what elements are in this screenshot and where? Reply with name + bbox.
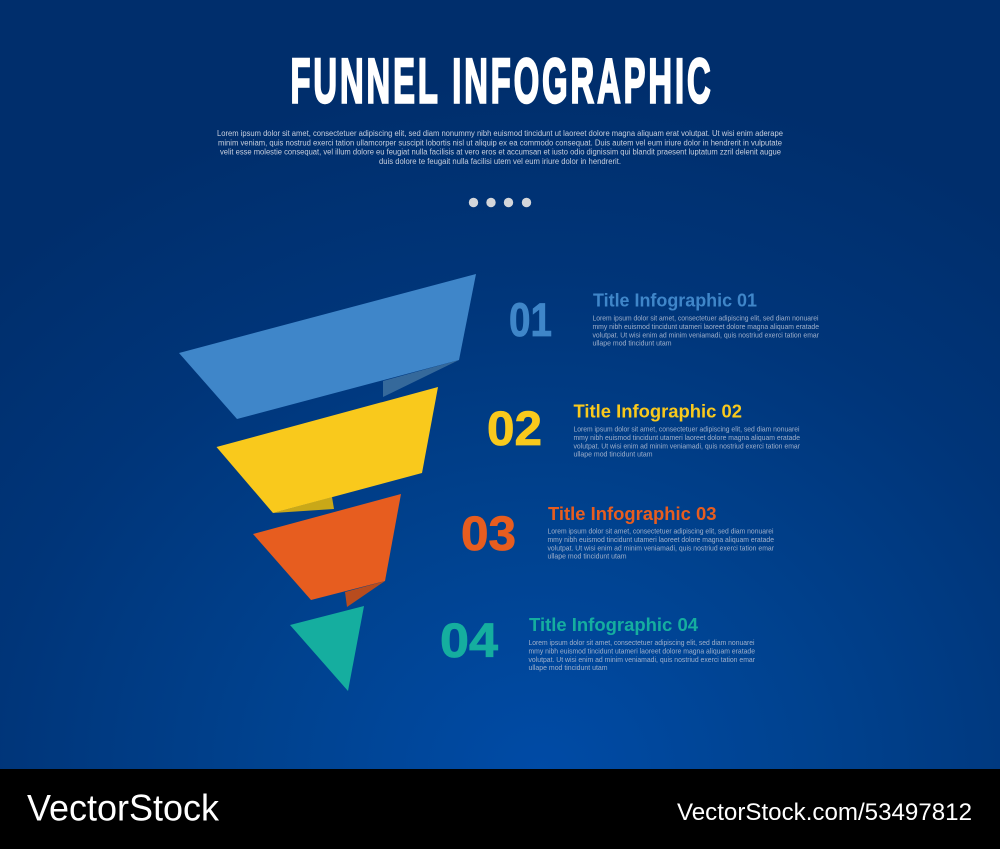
- body text 02: ullape mod tincidunt utam: [574, 450, 652, 458]
- body text 03: volutpat. Ut wisi enim ad minim veniamadi, quis nostriud exerci tation emar: [548, 544, 774, 552]
- body text 01: mmy nibh euismod tincidunt utameri laoreet dolore magna aliquam eratade: [592, 322, 819, 331]
- footer bar: [0, 769, 1000, 849]
- intro text block: duis dolore te feugait nulla facilisi utem vel eum iriure dolor in hendrerit.: [379, 157, 621, 166]
- body text 04: mmy nibh euismod tincidunt utameri laoreet dolore magna aliquam eratade: [528, 646, 755, 656]
- body text 01: Lorem ipsum dolor sit amet, consectetuer adipiscing elit, sed diam nonuarei: [592, 314, 819, 322]
- body text 04: Lorem ipsum dolor sit amet, consectetuer adipiscing elit, sed diam nonuarei: [528, 638, 755, 647]
- footer logo: VectorStock: [27, 788, 219, 828]
- body text 03: mmy nibh euismod tincidunt utameri laoreet dolore magna aliquam eratade: [548, 535, 774, 544]
- number 04: 04: [440, 615, 498, 668]
- footer url: VectorStock.com/53497812: [677, 799, 972, 826]
- body text 02: [574, 424, 800, 458]
- funnel chart: [179, 274, 476, 691]
- item 03: [461, 504, 774, 561]
- body text 03: ullape mod tincidunt utam: [548, 552, 626, 560]
- item 01: [509, 290, 819, 348]
- item 04: [440, 615, 755, 672]
- heading 02: Title Infographic 02: [574, 402, 742, 422]
- heading 04: Title Infographic 04: [529, 615, 698, 635]
- body text 04: [528, 638, 755, 672]
- body text 03: Lorem ipsum dolor sit amet, consectetuer adipiscing elit, sed diam nonuarei: [548, 526, 774, 536]
- funnel segment 2: yellow: [216, 387, 438, 513]
- body text 04: ullape mod tincidunt utam: [528, 663, 608, 672]
- heading 01: Title Infographic 01: [593, 290, 757, 310]
- funnel segment 1: blue: [179, 274, 476, 419]
- funnel segment 3: orange: [253, 494, 401, 607]
- number 02: 02: [487, 403, 542, 456]
- intro text block: velit esse molestie consequat, vel illum dolore eu feugiat nulla facilisis at vero eros et accumsan et iusto odio dignissim qui blandit praesent luptatum zzril delenit augue: [220, 148, 782, 156]
- body text 01: ullape mod tincidunt utam: [592, 338, 672, 348]
- number 01: 01: [509, 293, 552, 346]
- pagination dots: [469, 198, 531, 207]
- number 03: 03: [461, 508, 516, 561]
- item 02: [487, 402, 800, 458]
- body text 03: [548, 526, 774, 560]
- intro text block: [217, 129, 784, 166]
- body text 04: volutpat. Ut wisi enim ad minim veniamadi, quis nostriud exerci tation emar: [528, 655, 755, 664]
- heading 03: Title Infographic 03: [548, 504, 716, 524]
- intro text block: Lorem ipsum dolor sit amet, consectetuer adipiscing elit, sed diam nonummy nibh euismod tincidunt ut laoreet dolore magna aliquam erat volutpat. Ut wisi enim aderape: [217, 129, 784, 138]
- body text 01: [592, 314, 819, 348]
- body text 02: volutpat. Ut wisi enim ad minim veniamadi, quis nostriud exerci tation emar: [574, 442, 800, 450]
- funnel segment 4: teal: [290, 606, 364, 691]
- body text 02: mmy nibh euismod tincidunt utameri laoreet dolore magna aliquam eratade: [574, 433, 800, 442]
- body text 02: Lorem ipsum dolor sit amet, consectetuer adipiscing elit, sed diam nonuarei: [574, 424, 800, 434]
- title: FUNNEL INFOGRAPHIC: [290, 46, 711, 116]
- intro text block: minim veniam, quis nostrud exerci tation ullamcorper suscipit lobortis nisl ut aliquip ex ea commodo consequat. Duis autem vel eum iriure dolor in hendrerit in vulputate: [218, 138, 783, 148]
- body text 01: volutpat. Ut wisi enim ad minim veniamadi, quis nostriud exerci tation emar: [592, 330, 819, 340]
